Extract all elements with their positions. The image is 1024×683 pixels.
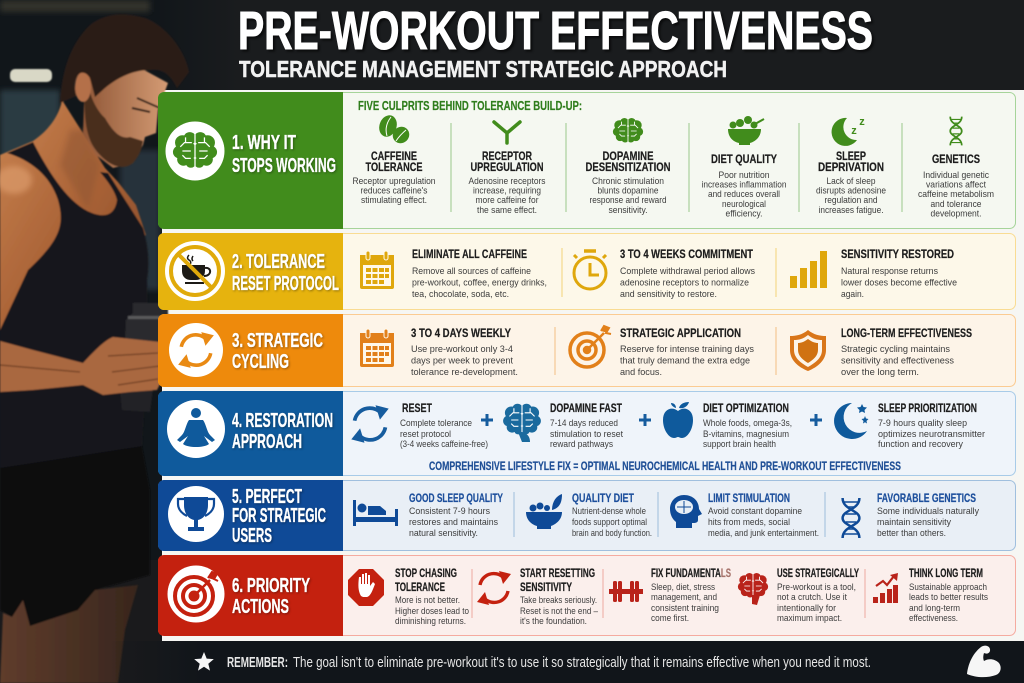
icon: moon [832,116,865,146]
section heading: 4. RESTORATION [232,410,333,432]
panel: 2 tolerance reset protocol [158,233,1016,310]
fix fundamentals: Sleep, diet, stress [651,582,715,592]
section heading [232,410,333,453]
section heading: FOR STRATEGIC [232,505,326,527]
start resetting sensitivity: it's the foundation. [520,616,587,626]
limit stimulation: hits from meds, social [708,517,790,527]
footer bar [110,641,1024,683]
dopamine desensitization: Chronic stimulation [592,176,664,186]
3 to 4 days weekly: days per week to prevent [411,356,513,366]
receptor upregulation: UPREGULATION [470,162,544,174]
eliminate all caffeine: tea, chocolate, soda, etc. [412,289,509,299]
panel: 5 perfect for strategic users [158,480,1016,551]
sleep deprivation: Lack of sleep [826,176,876,186]
eliminate all caffeine: pre-workout, coffee, energy drinks, [412,277,547,287]
beard [84,92,143,167]
fix fundamentals: come first. [651,613,689,623]
section heading [232,251,339,295]
good sleep quality: natural sensitivity. [409,528,478,538]
limit stimulation: Avoid constant dopamine [708,506,802,516]
use strategically: not a crutch. Use it [777,592,847,602]
genetics: and tolerance [930,199,982,209]
receptor upregulation [468,122,546,215]
sleep prioritization: SLEEP PRIORITIZATION [878,403,977,415]
favorable genetics [843,493,979,538]
icon: flexed bicep [967,646,1001,677]
genetics: caffeine metabolism [918,189,994,199]
sleep deprivation [816,116,886,215]
reminder text: The goal isn't to eliminate pre-workout it's to use it so strategically that it remains effective when you need it most. [293,655,871,671]
strategic application [570,326,754,377]
3 to 4 days weekly: 3 TO 4 DAYS WEEKLY [411,328,511,340]
3 to 4 weeks commitment: and sensitivity to restore. [620,289,717,299]
legs [0,585,138,683]
receptor upregulation: the same effect. [477,205,537,215]
long-term effectiveness: LONG-TERM EFFECTIVENESS [841,328,972,340]
3 to 4 weeks commitment: adenosine receptors to normalize [620,277,749,287]
sleep prioritization: 7-9 hours quality sleep [878,418,967,428]
receptor upregulation: RECEPTOR [482,151,533,163]
genetics: Individual genetic [923,170,989,180]
favorable genetics: Some individuals naturally [877,506,979,516]
caffeine tolerance: reduces caffeine's [360,186,428,196]
long-term effectiveness: over the long term. [841,367,919,377]
sleep deprivation: regulation and [824,195,878,205]
icon: moon and stars [834,403,868,439]
strategic application: STRATEGIC APPLICATION [620,328,741,340]
think long term: Sustainable approach [909,582,987,592]
think long term [873,568,988,623]
genetics: GENETICS [932,154,980,166]
section heading: STOPS WORKING [232,155,336,177]
panel: 1 why it stops working [158,92,1016,229]
sleep deprivation: increases fatigue. [818,205,884,215]
icon: target [570,326,611,367]
icon: receptor [494,122,520,143]
fix fundamentals [609,568,731,623]
receptor upregulation: Adenosine receptors [468,176,546,186]
icon: reset arrows [351,405,389,443]
section heading: ACTIONS [232,596,289,618]
icon: stopwatch [574,251,606,289]
section heading: RESET PROTOCOL [232,273,339,295]
limit stimulation: LIMIT STIMULATION [708,493,790,505]
stop chasing tolerance: TOLERANCE [395,582,445,594]
icon: moon: z [859,116,865,128]
section heading: 5. PERFECT [232,486,302,508]
stop chasing tolerance: STOP CHASING [395,568,457,580]
icon: rising bars [790,251,827,288]
dopamine fast: stimulation to reset [550,429,623,439]
diet quality: increases inflammation [702,180,786,190]
caffeine tolerance: Receptor upregulation [352,176,436,186]
favorable genetics: better than others. [877,528,946,538]
section heading [232,486,326,547]
icon: head with brain [670,495,702,528]
think long term: THINK LONG TERM [909,568,983,580]
eliminate all caffeine: ELIMINATE ALL CAFFEINE [412,249,527,261]
panel: 3 strategic cycling [158,314,1016,387]
favorable genetics: maintain sensitivity [877,517,951,527]
fix fundamentals: FIX FUNDAMENTALS [651,568,731,580]
section heading: USERS [232,525,272,547]
dopamine desensitization [586,118,670,215]
long-term effectiveness: Strategic cycling maintains [841,344,950,354]
think long term: leads to better results [909,592,988,602]
quality diet: foods support optimal [572,517,647,527]
dopamine desensitization: blunts dopamine [598,186,658,196]
dopamine desensitization: response and reward [590,195,666,205]
skin: shoulders and neck [0,100,146,345]
panel: 4 restoration approach [158,391,1016,476]
dopamine fast: 7-14 days reduced [550,418,618,428]
quality diet [526,493,652,538]
favorable genetics: FAVORABLE GENETICS [877,493,976,505]
strategic application: Reserve for intense training days [620,344,754,354]
tank top [0,142,148,468]
ear [75,72,91,102]
forearm and hand [0,337,165,395]
shorts [0,446,150,626]
sleep deprivation: DEPRIVATION [818,162,884,174]
icon: brain [503,404,541,442]
eye and brow [132,98,162,112]
use strategically: maximum impact. [777,613,842,623]
icon: brain [738,573,768,605]
caffeine tolerance: stimulating effect. [361,195,427,205]
face [83,65,168,168]
icon: shield [790,330,826,371]
icon: calendar [360,251,394,289]
sensitivity restored: SENSITIVITY RESTORED [841,249,954,261]
section heading [232,575,310,618]
icon: cycling arrows [169,323,223,377]
diet quality: DIET QUALITY [711,154,777,166]
sleep deprivation: SLEEP [836,151,866,163]
section heading: 2. TOLERANCE [232,251,325,273]
use strategically: USE STRATEGICALLY [777,568,859,580]
man with shaker bottle [0,14,189,683]
start resetting sensitivity: SENSITIVITY [520,582,572,594]
icon: growth chart [873,573,898,603]
start resetting sensitivity: Take breaks seriously. [520,595,597,605]
icon: brain [613,118,643,143]
receptor upregulation: increase, requiring [473,186,541,196]
strategic application: that truly demand the extra edge [620,356,750,366]
limit stimulation: media, and junk entertainment. [708,528,819,538]
arm highlight [0,166,32,194]
good sleep quality: restores and maintains [409,517,498,527]
sleep prioritization [834,403,985,449]
dopamine desensitization: DESENSITIZATION [586,162,670,174]
icon: brain badge [166,122,224,180]
sub-heading: FIVE CULPRITS BEHIND TOLERANCE BUILD-UP: [358,99,582,113]
caffeine tolerance [352,113,436,205]
subtitle: TOLERANCE MANAGEMENT STRATEGIC APPROACH [239,56,727,82]
caffeine tolerance: TOLERANCE [366,162,423,174]
icon: meditation [167,400,225,458]
dopamine fast: DOPAMINE FAST [550,403,622,415]
section heading: 1. WHY IT [232,132,296,154]
use strategically: Pre-workout is a tool, [777,582,856,592]
reminder text: REMEMBER: [227,655,288,671]
diet quality: Poor nutrition [718,170,770,180]
icon: dna [843,498,859,538]
use strategically [738,568,859,623]
diet optimization: Whole foods, omega-3s, [703,418,792,428]
sleep prioritization: optimizes neurotransmitter [878,429,985,439]
icon: bowl [728,116,764,145]
reset: (3-4 weeks caffeine-free) [400,439,488,449]
eliminate all caffeine: Remove all sources of caffeine [412,266,531,276]
plus [481,414,822,426]
neck shadow [60,130,100,210]
shaker base [120,388,153,412]
icon: dumbbell [609,581,643,602]
use strategically: intentionally for [777,603,836,613]
section heading: 3. STRATEGIC [232,330,323,352]
icon: bed [353,500,398,526]
icon: moon: z [851,125,857,137]
limit stimulation [670,493,819,538]
genetics: variations affect [926,180,986,190]
icon: dna [950,117,962,145]
start resetting sensitivity [477,568,599,626]
sensitivity restored: Natural response returns [841,266,938,276]
fix fundamentals: consistent training [651,603,719,613]
stop chasing tolerance: More is not better. [395,595,460,605]
diet optimization: B-vitamins, magnesium [703,429,789,439]
genetics [918,117,994,218]
icon: trophy [168,486,224,542]
sensitivity restored: lower doses become effective [841,277,957,287]
diet optimization [663,402,792,449]
genetics: development. [930,208,982,218]
start resetting sensitivity: START RESETTING [520,568,595,580]
long-term effectiveness [790,328,972,377]
section heading: 6. PRIORITY [232,575,310,597]
diet quality [702,116,786,218]
3 to 4 days weekly: Use pre-workout only 3-4 [411,344,513,354]
icon: star [194,652,214,671]
diet quality: efficiency. [726,208,762,218]
sensitivity restored: again. [841,289,864,299]
caffeine tolerance: CAFFEINE [371,151,417,163]
good sleep quality: Consistent 7-9 hours [409,506,490,516]
dopamine desensitization: DOPAMINE [602,151,654,163]
stop chasing tolerance: Higher doses lead to [395,606,469,616]
diet optimization: support brain health [703,439,776,449]
section heading [232,330,323,373]
icon: target [168,566,224,622]
diet quality: and reduces overall [708,189,780,199]
icon: stop hand [348,569,384,606]
sensitivity restored [790,249,957,299]
dopamine fast [503,403,623,449]
think long term: and long-term [909,603,960,613]
quality diet: QUALITY DIET [572,493,634,505]
good sleep quality [353,493,503,538]
icon: no coffee [165,241,225,301]
start resetting sensitivity: Reset is not the end – [520,606,599,616]
long-term effectiveness: sensitivity and effectiveness [841,356,954,366]
icon: apple [663,402,693,438]
strategic application: and focus. [620,367,662,377]
3 to 4 weeks commitment: Complete withdrawal period allows [620,266,755,276]
diet optimization: DIET OPTIMIZATION [703,403,789,415]
quality diet: brain and body function. [572,528,652,538]
panel: 6 priority actions [158,555,1016,636]
receptor upregulation: more caffeine for [476,195,538,205]
think long term: effectiveness. [909,613,958,623]
stop chasing tolerance: diminishing returns. [395,616,466,626]
3 to 4 weeks commitment: 3 TO 4 WEEKS COMMITMENT [620,249,753,261]
hair [60,14,189,103]
icon: coffee beans [376,113,413,147]
icon: calendar [360,329,394,367]
reset [351,403,488,449]
section heading: APPROACH [232,431,302,453]
fix fundamentals: management, and [651,592,717,602]
reset: RESET [402,403,432,415]
eliminate all caffeine [360,249,547,299]
icon: reset arrows [477,571,511,605]
3 to 4 days weekly [360,328,518,377]
shaker lid [125,303,170,345]
3 to 4 days weekly: tolerance re-development. [411,367,518,377]
3 to 4 weeks commitment [574,249,755,299]
page backing behind panels [162,90,1024,641]
section heading: CYCLING [232,351,289,373]
dopamine fast: reward pathways [550,439,613,449]
icon: salad bowl [526,494,562,529]
sleep deprivation: disrupts adenosine [816,186,886,196]
sleep prioritization: function and recovery [878,439,963,449]
quality diet: Nutrient-dense whole [572,506,646,516]
good sleep quality: GOOD SLEEP QUALITY [409,493,503,505]
dopamine desensitization: sensitivity. [608,205,648,215]
stop chasing tolerance [348,568,469,626]
section heading [232,132,336,177]
reset: reset protocol [400,429,451,439]
reset: Complete tolerance [400,418,472,428]
diet quality: neurological [722,199,766,209]
